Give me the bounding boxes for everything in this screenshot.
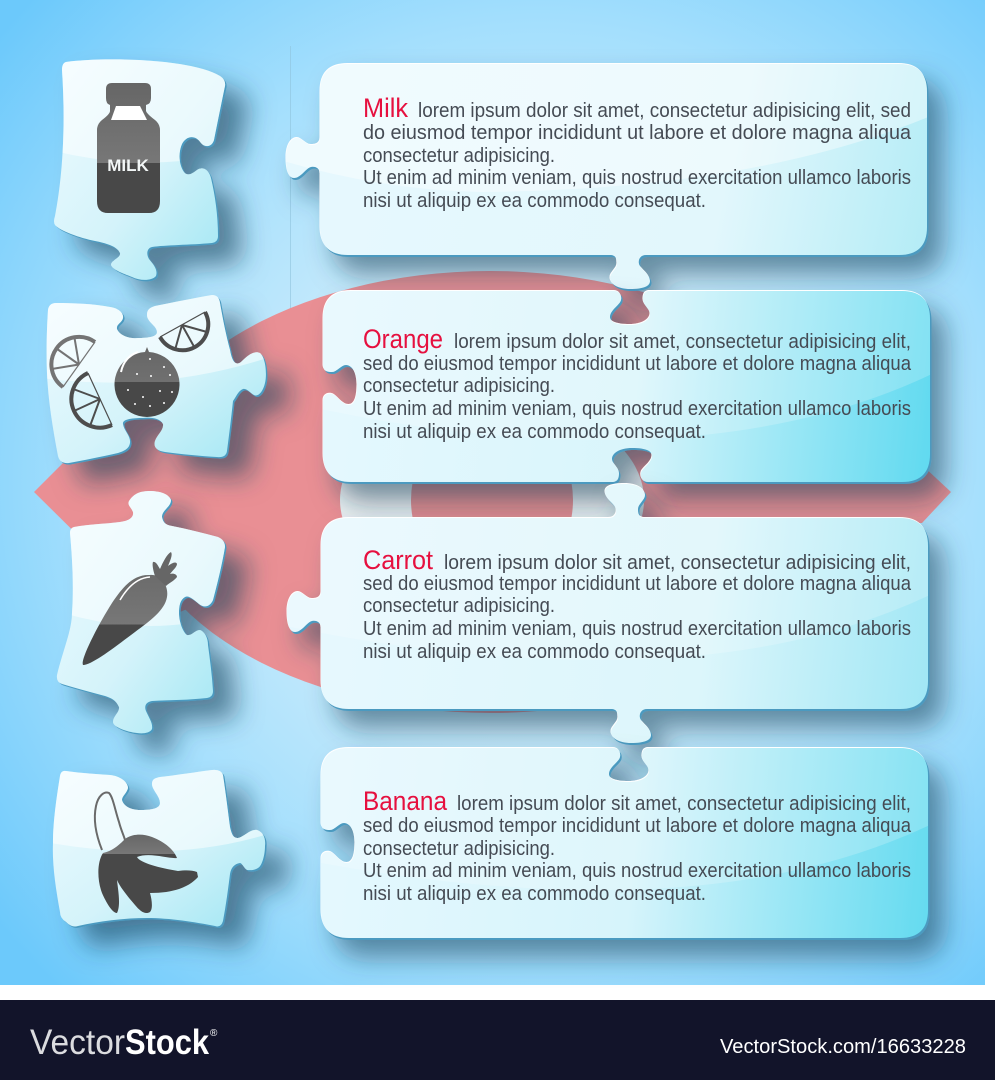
text block: Milk description: lorem ipsum dolor sit amet, consectetur adipisicing elit, sed: [418, 100, 911, 122]
text block: Banana description: nisi ut aliquip ex ea commodo consequat.: [363, 883, 706, 905]
heading: Milk: Milk: [363, 93, 408, 123]
footer image id: VectorStock.com/16633228: [720, 1036, 966, 1058]
icon: orange and slices: [51, 312, 208, 428]
text block: Milk description: nisi ut aliquip ex ea commodo consequat.: [363, 190, 706, 212]
puzzle piece: orange: [30, 280, 290, 465]
text block: Carrot description: Ut enim ad minim veniam, quis nostrud exercitation ullamco laboris: [363, 618, 911, 640]
text block: Carrot description: [363, 552, 912, 663]
heading: Orange: Orange: [363, 324, 443, 354]
text block: Orange description: sed do eiusmod tempor incididunt ut labore et dolore magna aliqua: [363, 353, 912, 375]
puzzle piece: carrot: [40, 480, 240, 735]
footer logo: Stock: [125, 1023, 209, 1062]
icon: milk bottle: MILK: [107, 156, 149, 175]
text block: Carrot description: nisi ut aliquip ex ea commodo consequat.: [363, 641, 706, 663]
footer logo: [30, 1023, 218, 1062]
card: milk: [280, 50, 940, 291]
text block: Milk description: do eiusmod tempor incididunt ut labore et dolore magna aliqua: [363, 122, 912, 144]
footer logo: Vector: [30, 1023, 125, 1062]
footer bar: [0, 1000, 995, 1080]
icon: banana bunch: [95, 793, 198, 913]
card: orange: [280, 280, 940, 484]
text block: Banana description: lorem ipsum dolor sit amet, consectetur adipisicing elit,: [457, 793, 911, 815]
card: carrot: [280, 480, 940, 745]
text block: Carrot description: lorem ipsum dolor sit amet, consectetur adipisicing elit,: [444, 552, 911, 574]
text block: Milk description: consectetur adipisicing.: [363, 145, 555, 167]
icon: milk bottle: [97, 83, 160, 213]
text block: Orange description: Ut enim ad minim veniam, quis nostrud exercitation ullamco laboris: [363, 398, 911, 420]
puzzle piece: milk: [40, 40, 240, 281]
heading: Carrot: Carrot: [363, 545, 433, 575]
text block: Banana description: Ut enim ad minim veniam, quis nostrud exercitation ullamco laboris: [363, 860, 911, 882]
text block: Orange description: consectetur adipisicing.: [363, 375, 555, 397]
footer logo: ®: [210, 1028, 218, 1039]
icon: carrot: [83, 552, 177, 665]
text block: Orange description: lorem ipsum dolor sit amet, consectetur adipisicing elit,: [454, 331, 911, 353]
text block: Milk description: Ut enim ad minim veniam, quis nostrud exercitation ullamco laboris: [363, 167, 911, 189]
text block: Orange description: nisi ut aliquip ex ea commodo consequat.: [363, 421, 706, 443]
text block: Orange description: [363, 331, 912, 443]
heading: Banana: Banana: [363, 786, 448, 816]
text block: Banana description: consectetur adipisicing.: [363, 838, 555, 860]
text block: Milk description: [363, 100, 912, 212]
central pink double arrow with ellipse: [34, 271, 951, 713]
text block: Carrot description: sed do eiusmod tempor incididunt ut labore et dolore magna aliqua: [363, 573, 912, 595]
text block: Banana description: [363, 793, 912, 905]
thin vertical guide line: [290, 46, 291, 336]
text block: Carrot description: consectetur adipisicing.: [363, 595, 555, 617]
puzzle piece: banana: [40, 750, 280, 928]
card: banana: [280, 740, 940, 940]
text block: Banana description: sed do eiusmod tempor incididunt ut labore et dolore magna aliqua: [363, 815, 912, 837]
